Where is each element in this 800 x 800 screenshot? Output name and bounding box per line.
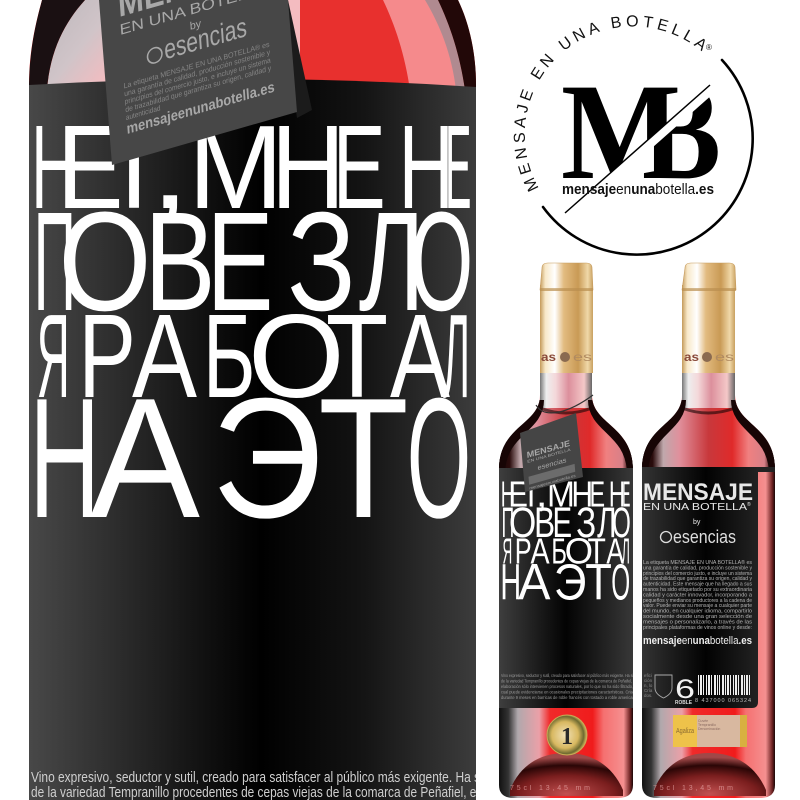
- back label paragraph: socialmente desde una gran selección de: [643, 614, 752, 620]
- main russian slogan: Т: [326, 290, 388, 423]
- main russian slogan: Н: [399, 101, 454, 234]
- glass shoulder: [29, 0, 476, 87]
- main russian slogan: М: [188, 101, 283, 234]
- label slogan: О: [565, 532, 593, 571]
- main russian slogan: Н: [271, 101, 345, 234]
- cord and mini tag: EN UNA BOTELLA: [527, 447, 571, 464]
- back label paragraph: autenticidad. Este mensaje que ha llegado a sus: [643, 582, 752, 588]
- embossed capacity text: 75cl 13,45 mm: [653, 785, 733, 792]
- vintage number: 6: [675, 674, 695, 704]
- hanging tag: esencias: [163, 11, 248, 65]
- label slogan: Т: [522, 475, 541, 515]
- label slogan: О: [612, 499, 631, 546]
- back bottle: [642, 263, 775, 798]
- gold medal: 1: [561, 724, 573, 750]
- bottle body: [642, 373, 775, 798]
- back label brand: ®: [747, 501, 751, 508]
- black label: [499, 468, 633, 708]
- shoulder shadow: [642, 400, 775, 472]
- label slogan: О: [611, 553, 630, 610]
- registered mark: ®: [706, 43, 712, 52]
- cord and mini tag: mensajeenunabotella.es: [529, 473, 576, 491]
- hanging tag: una garantía de calidad, producción sostenible y: [124, 47, 271, 98]
- appellation shield: [655, 675, 672, 698]
- embossed capacity text: 75cl 13,45 mm: [510, 785, 590, 792]
- back label brand: MENSAJE: [643, 479, 753, 506]
- back label: [642, 467, 775, 708]
- large bottle close-up: Е: [445, 101, 471, 234]
- main russian slogan: О: [248, 290, 345, 423]
- label slogan: [502, 482, 630, 600]
- label slogan: Е: [509, 475, 528, 515]
- label slogan: З: [576, 499, 596, 546]
- brand logo: [514, 15, 754, 256]
- small tasting note: Vino expresivo, seductor y sutil, creado para satisfacer al público más exigente. Ha sido: [501, 673, 637, 678]
- roble caption: ROBLE: [675, 700, 692, 706]
- main russian slogan: Э: [212, 363, 322, 554]
- hanging tag: principios del comercio justo, e incluye un sistema: [124, 55, 272, 106]
- main russian slogan: Я: [37, 290, 70, 423]
- winery sticker: Agaliza: [676, 728, 694, 735]
- back label url: mensajeenunabotella.es: [643, 635, 752, 647]
- main russian slogan: Т: [318, 363, 409, 554]
- back label paragraph: del mundo, en cualquier idioma, compartirlo: [643, 609, 752, 615]
- label slogan: О: [509, 499, 536, 546]
- back label paragraph: manos ha sido etiquetado por su extraordinaria: [643, 587, 752, 593]
- main russian slogan: О: [410, 182, 473, 340]
- gold capsule: as: [684, 350, 699, 364]
- main russian slogan: Н: [29, 363, 100, 554]
- label slogan: ,: [536, 475, 548, 515]
- hanging tag: mensajeenunabotella.es: [126, 79, 275, 138]
- main russian slogan: Б: [203, 290, 256, 423]
- label slogan: Б: [551, 532, 567, 571]
- back label paragraph: valor. Puede enviar su mensaje a cualquier parte: [643, 603, 752, 609]
- neck: [540, 372, 592, 408]
- wine text fragment: n, lo: [644, 683, 653, 688]
- main russian slogan: Е: [333, 101, 386, 234]
- gold medal: [547, 715, 587, 755]
- main russian slogan: Р: [78, 290, 136, 423]
- main russian slogan: В: [144, 182, 216, 340]
- barcode: [695, 675, 751, 704]
- small tasting note: durante 9 meses en barricas de roble francés con tostado a roble americano: [501, 695, 637, 700]
- hanging tag: [99, 0, 312, 165]
- label slogan: Н: [501, 475, 514, 515]
- winery sticker: Tempranillo: [698, 723, 716, 727]
- main russian slogan: А: [132, 290, 198, 423]
- back label paragraph: mensajes o personalizarlo, a través de las: [643, 619, 752, 625]
- cord and mini tag: MENSAJE: [526, 438, 571, 460]
- website address: mensajeenunabotella.es: [562, 182, 714, 198]
- hanging tag: de trazabilidad que garantiza su origen, calidad y: [125, 63, 272, 114]
- winery sticker: Denominación: [698, 727, 720, 731]
- winery sticker: Cuvée: [698, 719, 708, 723]
- main russian slogan: З: [287, 182, 356, 340]
- base punt: [510, 753, 623, 796]
- hanging tag: autenticidad: [126, 103, 161, 122]
- back label paragraph: de trazabilidad que garantiza su origen, calidad y: [643, 576, 752, 582]
- large bottle close-up: [29, 0, 496, 800]
- label slogan: Э: [554, 553, 587, 610]
- hanging tag: by: [190, 18, 202, 33]
- front bottle: Е: [623, 475, 630, 515]
- label slogan: А: [531, 532, 550, 571]
- back label paragraph: La etiqueta MENSAJE EN UNA BOTELLA® es: [643, 559, 752, 566]
- shoulder glass: [499, 403, 633, 470]
- MB monogram: [563, 84, 718, 214]
- large bottle close-up: О: [407, 363, 471, 554]
- back label paragraph: principales plataformas de vinos online y desde:: [643, 625, 752, 631]
- curved brand name: [525, 26, 707, 188]
- back label brand: [643, 479, 753, 526]
- main russian slogan: А: [390, 290, 450, 423]
- neck: [682, 372, 735, 408]
- small tasting note: de la variedad Tempranillo procedentes de cepas viejas de la comarca de Peñafiel, en: [501, 678, 637, 684]
- MB monogram: M: [561, 55, 681, 208]
- curved text: MENSAJE EN UNA BOTELLA: [514, 15, 705, 192]
- wine text fragment: ción: [644, 678, 653, 683]
- barcode: 8 437000 065324: [695, 698, 751, 704]
- label slogan: Т: [585, 553, 612, 610]
- label slogan: Е: [552, 499, 572, 546]
- main russian slogan: Л: [359, 182, 425, 340]
- base punt: [654, 753, 766, 796]
- MB monogram: B: [642, 55, 721, 208]
- label slogan: Л: [597, 499, 617, 546]
- label slogan: Н: [609, 475, 625, 515]
- label slogan: А: [606, 532, 624, 571]
- label slogan: М: [547, 475, 575, 515]
- circular ring: [543, 60, 753, 255]
- back label paragraph: [643, 559, 752, 631]
- main russian slogan: Е: [207, 182, 273, 340]
- main russian slogan: О: [58, 182, 152, 340]
- wine text fragment: efici: [644, 673, 652, 678]
- label slogan: Т: [587, 532, 606, 571]
- back label paragraph: pequeños y medianos productores a la cadena de: [643, 598, 752, 604]
- small tasting note: cual puede evidenciarse en ocasionales precipitaciones características. Criado: [501, 690, 637, 694]
- front bottle: [499, 263, 637, 798]
- tasting note text: [31, 771, 476, 800]
- wine text fragment: dos.: [644, 693, 652, 698]
- back label brand: by: [693, 519, 701, 526]
- label slogan: Я: [502, 532, 512, 571]
- shoulder shadow: [499, 400, 633, 472]
- shoulder glass: [642, 403, 775, 470]
- main russian slogan: П: [34, 182, 76, 340]
- main russian slogan: Е: [58, 101, 123, 234]
- label slogan: А: [518, 553, 551, 610]
- cord and mini tag: [520, 395, 593, 492]
- hanging tag: La etiqueta MENSAJE EN UNA BOTELLA® es: [123, 39, 270, 90]
- gold capsule: [682, 263, 736, 373]
- label slogan: Н: [571, 475, 593, 515]
- back label paragraph: principios del comercio justo, e incluye un sistema: [643, 571, 752, 577]
- label slogan: П: [502, 499, 514, 546]
- esencias logo: esencias: [673, 527, 736, 547]
- label slogan: Н: [500, 553, 521, 610]
- main russian slogan: Т: [102, 101, 166, 234]
- wine text fragment: [644, 673, 653, 698]
- gold capsule: [540, 263, 593, 373]
- front bottle: Л: [622, 532, 630, 571]
- back label paragraph: calidad y carácter innovador, incorporando a: [643, 592, 752, 598]
- main russian slogan: ,: [150, 101, 190, 234]
- large bottle close-up: Л: [442, 290, 470, 423]
- gold capsule: es: [573, 350, 592, 364]
- main russian slogan: Н: [31, 101, 76, 234]
- back label paragraph: una garantía de calidad, producción sostenible y: [643, 565, 752, 571]
- label slogan: В: [534, 499, 555, 546]
- main russian slogan: [29, 101, 473, 554]
- label slogan: Е: [590, 475, 605, 515]
- gold capsule: as: [541, 350, 556, 364]
- cord and mini tag: esencias: [537, 457, 567, 472]
- wine text fragment: Cría: [644, 688, 653, 693]
- gold capsule: es: [715, 350, 734, 364]
- winery sticker: [673, 715, 747, 747]
- label slogan: Р: [515, 532, 532, 571]
- small tasting note: [501, 673, 637, 700]
- main russian slogan: А: [90, 363, 200, 554]
- tasting note text: Vino expresivo, seductor y sutil, creado para satisfacer al público más exigente. Ha sido: [31, 769, 496, 786]
- small tasting note: elaboración sólo intervienen procesos naturales, por lo que no ha sido filtrado, lo: [501, 684, 637, 689]
- back label brand: EN UNA BOTELLA: [643, 501, 747, 513]
- bottle body: [499, 373, 633, 798]
- black front label: [29, 79, 476, 800]
